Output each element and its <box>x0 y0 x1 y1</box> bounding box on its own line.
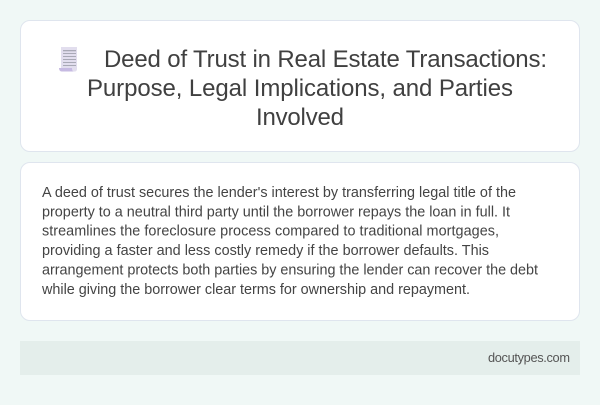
panel: description card <box>20 162 580 321</box>
text block: description <box>41 185 538 298</box>
text block: description: A deed of trust secures the lender's interest by transferring legal title of the <box>42 185 516 201</box>
panel: footer bar <box>20 341 580 375</box>
title: Deed of Trust in Real Estate Transactions: <box>104 46 547 73</box>
panel: title card <box>20 20 580 152</box>
title: Involved <box>256 104 344 131</box>
text block: description: property to a neutral third party until the borrower repays the loan in full. It <box>42 204 510 220</box>
title: Purpose, Legal Implications, and Parties <box>87 75 513 102</box>
title <box>87 46 547 131</box>
text: source: docutypes.com <box>488 350 570 365</box>
text block: description: arrangement protects both parties by ensuring the lender can recover the debt <box>42 262 538 278</box>
text block: description: while giving the borrower clear terms for ownership and repayment. <box>41 282 470 298</box>
text block: description: streamlines the foreclosure process compared to traditional mortgages, <box>42 224 499 240</box>
text block: description: providing a faster and less costly remedy if the borrower defaults. This <box>42 243 489 259</box>
icon: document scroll <box>59 47 77 72</box>
